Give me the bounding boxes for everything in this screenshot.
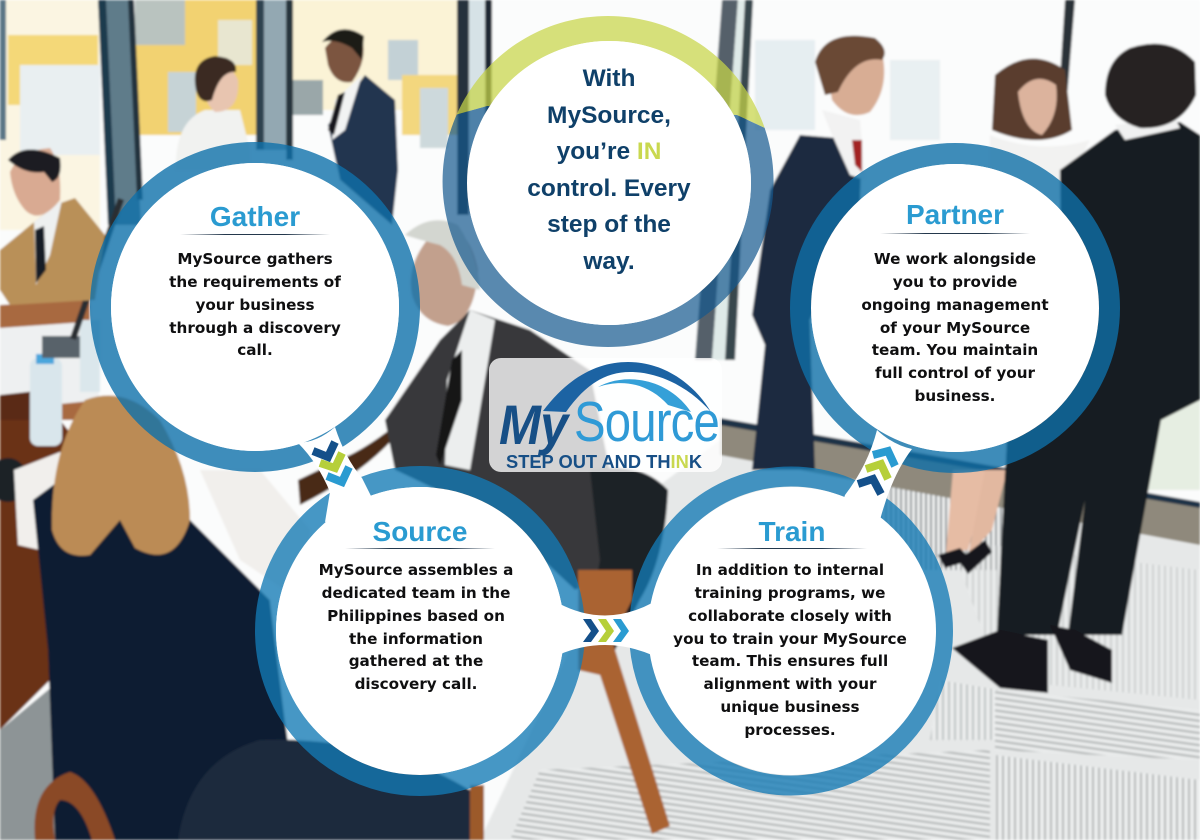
window frames: [98, 0, 141, 225]
wooden chair frame: [578, 570, 670, 834]
dark chair and wood arm: [178, 740, 470, 840]
standing man in black suit: [997, 122, 1200, 635]
body text: gathered at the: [349, 652, 483, 670]
body text: your business: [195, 296, 315, 314]
ring: [255, 466, 584, 796]
wood chair arm behind source circle: [298, 425, 396, 505]
heading: Gather: Gather: [210, 201, 300, 232]
intro statement: you’re IN: [557, 138, 661, 165]
white disc: [111, 163, 399, 451]
body text: Philippines based on: [327, 607, 505, 625]
panel: Source: [255, 466, 584, 796]
panel: intro circle: [442, 16, 774, 347]
floor: [480, 440, 1200, 840]
logo: MySource: [489, 358, 722, 472]
body text: dedicated team in the: [322, 584, 510, 602]
logo wordmark: My: [499, 393, 567, 456]
body text: call.: [237, 341, 273, 359]
body text: unique business: [720, 698, 860, 716]
arrow: chevrons pointing up: [858, 451, 895, 494]
body text: discovery call.: [355, 675, 477, 693]
body text: you to train your MySource: [673, 630, 907, 648]
intro statement: control. Every: [527, 175, 691, 202]
body text: We work alongside: [874, 250, 1036, 268]
body text: [673, 561, 907, 739]
body text: ongoing management: [861, 296, 1049, 314]
intro statement: step of the: [547, 211, 671, 238]
body text: team. This ensures full: [692, 652, 888, 670]
ring: blue and lime: [442, 16, 774, 347]
connector: Partner to Train: [844, 430, 912, 518]
body text: through a discovery: [169, 319, 341, 337]
heading: Source: Source: [373, 516, 467, 547]
logo wordmark: Source: [574, 390, 719, 454]
logo wordmark: [499, 390, 719, 456]
panel: Partner: [790, 143, 1120, 473]
connector: Gather to Source: [299, 427, 371, 522]
body text: In addition to internal: [696, 561, 884, 579]
ring: [90, 142, 420, 472]
ring: [790, 143, 1120, 473]
body text: the information: [349, 630, 483, 648]
dining woman in navy dress with blonde hair: [14, 452, 120, 550]
body text: [861, 250, 1049, 405]
white disc: [276, 487, 564, 775]
ring: [630, 466, 953, 796]
centre man in grey suit: [385, 310, 612, 590]
panel: Train: [630, 466, 953, 796]
panel: Gather: [90, 142, 420, 472]
body text: MySource assembles a: [319, 561, 513, 579]
body text: the requirements of: [169, 273, 341, 291]
arrow: chevrons pointing right: [583, 619, 629, 642]
body text: training programs, we: [695, 584, 885, 602]
body text: full control of your: [875, 364, 1035, 382]
left table and office items: [0, 300, 90, 420]
white disc: [467, 41, 751, 325]
body text: alignment with your: [703, 675, 877, 693]
body text: you to provide: [893, 273, 1017, 291]
body text: [319, 561, 513, 693]
body text: [169, 250, 341, 359]
body text: processes.: [744, 721, 836, 739]
intro statement: way.: [583, 248, 635, 275]
woman in white blouse: [176, 110, 250, 170]
standing woman: [990, 135, 1090, 230]
standing man in navy suit: [752, 135, 862, 470]
buildings: [0, 0, 100, 230]
heading: Partner: Partner: [906, 199, 1004, 230]
intro statement: With: [583, 65, 635, 92]
white disc: [648, 487, 936, 775]
man in tan jacket: [0, 198, 105, 305]
white disc: [811, 164, 1099, 452]
arrow: chevrons pointing down: [313, 442, 349, 482]
body text: collaborate closely with: [688, 607, 892, 625]
window sill: [720, 420, 1200, 545]
intro statement: [527, 65, 691, 275]
connector: Source to Train: [562, 604, 651, 654]
heading: Train: Train: [759, 516, 825, 547]
logo arcs: [543, 362, 711, 412]
body text: MySource gathers: [177, 250, 333, 268]
body text: team. You maintain: [872, 341, 1038, 359]
body text: of your MySource: [880, 319, 1030, 337]
man in navy suit, left: [328, 75, 398, 225]
body text: business.: [915, 387, 995, 405]
intro statement: MySource,: [547, 102, 671, 129]
logo tagline: STEP OUT AND THINK: [506, 451, 702, 472]
